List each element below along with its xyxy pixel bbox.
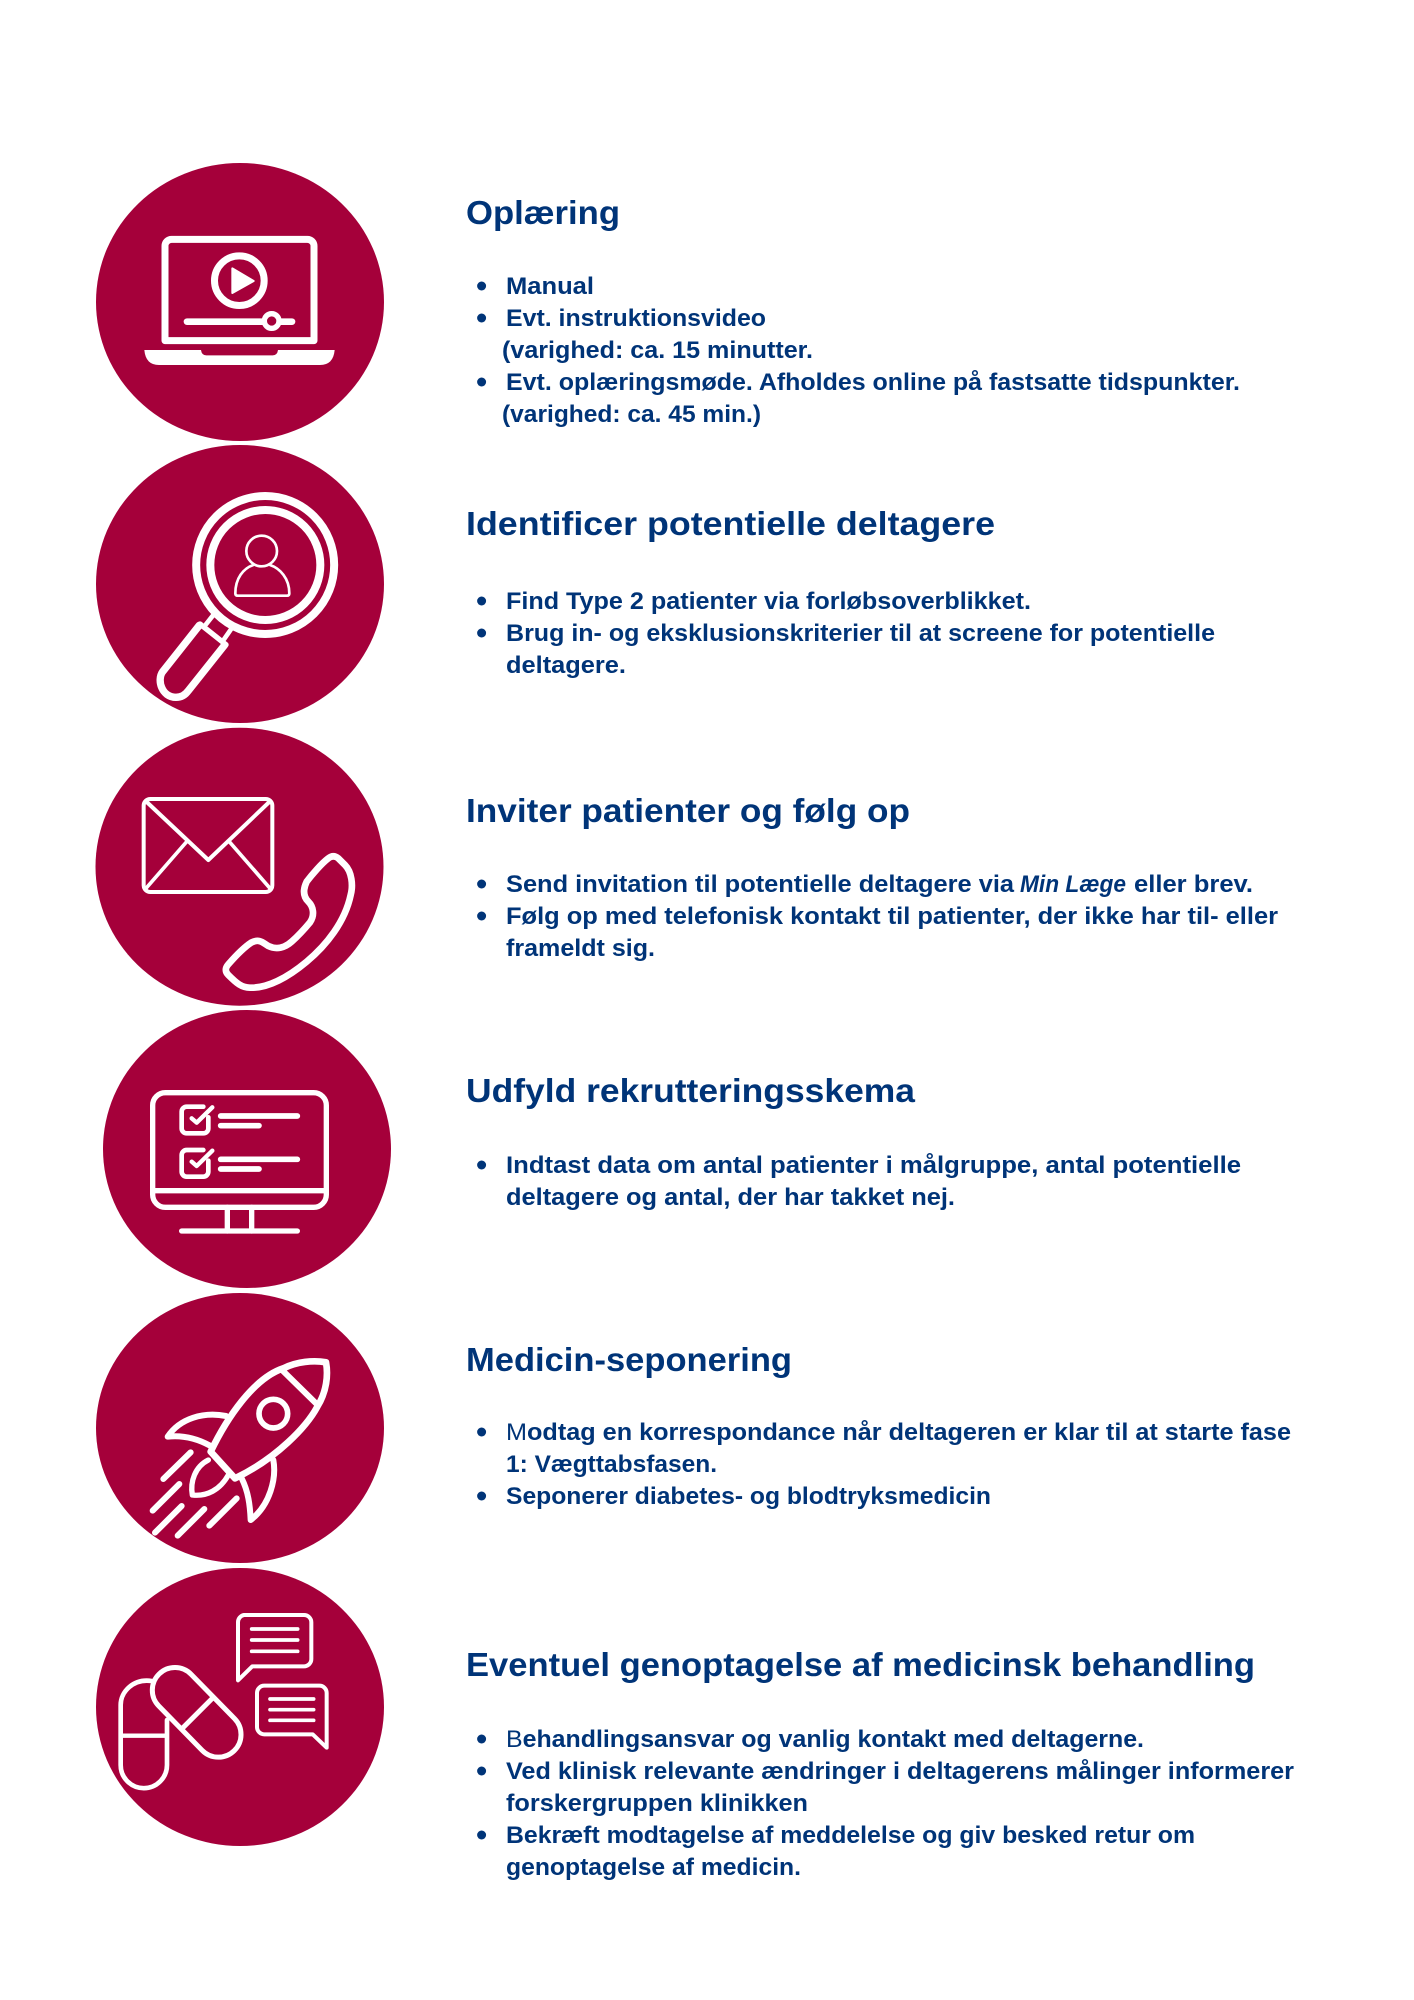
step 2: Identificer potentielle deltagere (96, 445, 1215, 723)
bullet list: Inviter: frameldt sig. (506, 935, 655, 962)
step 4: Udfyld rekrutteringsskema (103, 1010, 1241, 1288)
heading: Medicin-seponering: Medicin-seponering (466, 1341, 792, 1378)
bullet list: Oplæring: Evt. instruktionsvideo (506, 305, 766, 332)
step 5: Medicin-seponering (96, 1293, 1291, 1563)
heading: Udfyld rekrutteringsskema: Udfyld rekrutteringsskema (466, 1072, 916, 1109)
heading: Identificer potentielle deltagere: Identificer potentielle deltagere (466, 505, 995, 542)
bullet list: Medicin-seponering: Seponerer diabetes- og blodtryksmedicin (506, 1483, 991, 1510)
icon: laptop with video player in circle (96, 163, 384, 441)
bullet list: Identificer: Find Type 2 patienter via forløbsoverblikket. (506, 588, 1031, 615)
heading: Eventuel genoptagelse af medicinsk behandling: Eventuel genoptagelse af medicinsk behandling (466, 1646, 1255, 1683)
step 3: Inviter patienter og følg op (96, 728, 1278, 1006)
step 6: Eventuel genoptagelse af medicinsk behandling (96, 1568, 1294, 1881)
bullet list: Oplæring (477, 273, 1240, 428)
bullet list: Identificer: Brug in- og eksklusionskriterier til at screene for potentielle (506, 620, 1215, 647)
bullet list: Eventuel genoptagelse: forskergruppen klinikken (506, 1790, 808, 1817)
bullet list: Eventuel genoptagelse: Behandlingsansvar og vanlig kontakt med deltagerne. (506, 1726, 1144, 1753)
bullet list: Inviter: eller brev. (1134, 871, 1253, 898)
icon: envelope and telephone handset in circle (96, 728, 384, 1006)
icon: magnifying glass with person in circle (96, 445, 384, 723)
bullet list: Eventuel genoptagelse: Ved klinisk relevante ændringer i deltagerens målinger informerer (506, 1758, 1294, 1785)
bullet list: Inviter: Følg op med telefonisk kontakt til patienter, der ikke har til- eller (506, 903, 1278, 930)
icon: monitor with checklist in circle (103, 1010, 391, 1288)
bullet list: Medicin-seponering (477, 1419, 1291, 1510)
bullet list: Eventuel genoptagelse (477, 1726, 1294, 1881)
bullet list: Oplæring: Manual (506, 273, 594, 300)
bullet list: Oplæring: Evt. oplæringsmøde. Afholdes online på fastsatte tidspunkter. (506, 369, 1240, 396)
bullet list: Eventuel genoptagelse: genoptagelse af medicin. (506, 1854, 801, 1881)
bullet list: Oplæring: (varighed: ca. 45 min.) (502, 401, 761, 428)
icon: rocket in circle (96, 1293, 384, 1563)
bullet list: Udfyld (477, 1152, 1241, 1211)
bullet list: Identificer: deltagere. (506, 652, 626, 679)
heading: Inviter patienter og følg op: Inviter patienter og følg op (466, 792, 910, 829)
bullet list: Oplæring: (varighed: ca. 15 minutter. (502, 337, 813, 364)
bullet list: Inviter: Min Læge (1020, 871, 1126, 898)
bullet list: Udfyld: deltagere og antal, der har takket nej. (506, 1184, 955, 1211)
bullet list: Udfyld: Indtast data om antal patienter i målgruppe, antal potentielle (506, 1152, 1241, 1179)
bullet list: Identificer (477, 588, 1215, 679)
bullet list: Eventuel genoptagelse: Bekræft modtagelse af meddelelse og giv besked retur om (506, 1822, 1195, 1849)
icon: pills and speech bubbles in circle (96, 1568, 384, 1846)
bullet list: Inviter (477, 871, 1278, 962)
bullet list: Medicin-seponering: 1: Vægttabsfasen. (506, 1451, 717, 1478)
heading: Oplæring: Oplæring (466, 194, 620, 231)
bullet list: Medicin-seponering: Modtag en korrespondance når deltageren er klar til at starte fase (506, 1419, 1291, 1446)
bullet list: Inviter: Send invitation til potentielle deltagere via (506, 871, 1015, 898)
step 1: Oplæring (96, 163, 1240, 441)
